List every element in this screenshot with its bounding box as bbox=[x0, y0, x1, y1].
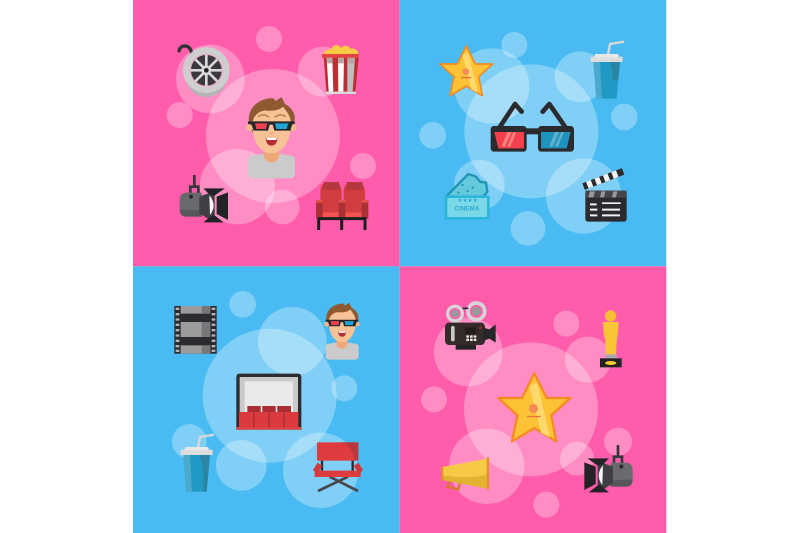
icon: star bbox=[498, 373, 570, 441]
icon: 3d glasses bbox=[491, 104, 574, 152]
bubbles bbox=[167, 26, 376, 224]
icon: popcorn bbox=[322, 45, 359, 94]
icon: cinema tickets: CINEMA bbox=[455, 206, 480, 213]
icon: film strip bbox=[174, 306, 217, 354]
icon: cinema seats bbox=[316, 182, 368, 230]
bubbles bbox=[172, 291, 358, 508]
icon: star bbox=[440, 46, 493, 96]
panel: blue top right bbox=[400, 0, 666, 266]
icon: clapperboard bbox=[582, 168, 627, 222]
icon: megaphone bbox=[441, 457, 489, 490]
icon: spotlight bbox=[584, 445, 633, 492]
icon: film camera bbox=[445, 303, 496, 350]
person with 3d glasses bbox=[246, 97, 297, 178]
icon: cinema tickets: ★★★★ bbox=[458, 197, 478, 204]
bubbles bbox=[419, 32, 638, 246]
icon: spotlight bbox=[180, 175, 228, 222]
panel: blue bottom left bbox=[133, 266, 400, 533]
icon: director's chair bbox=[313, 442, 363, 491]
bubbles bbox=[421, 311, 632, 518]
icon: soda cup bbox=[181, 435, 214, 492]
person with 3d glasses bbox=[324, 303, 360, 360]
panel: pink top left bbox=[133, 0, 400, 266]
icon: film reel bbox=[179, 46, 230, 97]
icon: soda cup bbox=[591, 42, 624, 99]
icon: cinema tickets bbox=[446, 174, 488, 218]
panel: pink bottom right bbox=[400, 266, 666, 533]
icon: award statuette bbox=[600, 310, 622, 367]
icon: cinema screen bbox=[236, 374, 301, 430]
